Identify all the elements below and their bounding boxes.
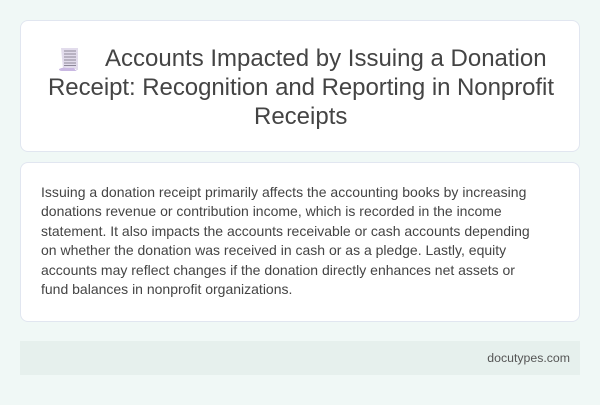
description text: donations revenue or contribution income, which is recorded in the income <box>41 203 502 219</box>
footer source text: docutypes.com <box>487 351 570 365</box>
description text: on whether the donation was received in cash or as a pledge. Lastly, equity <box>41 242 506 258</box>
panel: description card <box>20 162 580 322</box>
title: Receipt: Recognition and Reporting in Nonprofit <box>48 74 554 101</box>
description text: accounts may reflect changes if the donation directly enhances net assets or <box>41 262 515 278</box>
title: Receipts <box>254 103 347 130</box>
icon: receipt <box>59 48 78 71</box>
panel: title card <box>20 20 580 152</box>
title: Accounts Impacted by Issuing a Donation <box>105 45 547 72</box>
description text: statement. It also impacts the accounts receivable or cash accounts depending <box>41 223 530 239</box>
footer bar <box>20 341 580 375</box>
description text: fund balances in nonprofit organizations. <box>41 281 292 297</box>
description text: Issuing a donation receipt primarily affects the accounting books by increasing <box>41 184 526 200</box>
title <box>48 45 554 130</box>
description text <box>41 184 530 297</box>
